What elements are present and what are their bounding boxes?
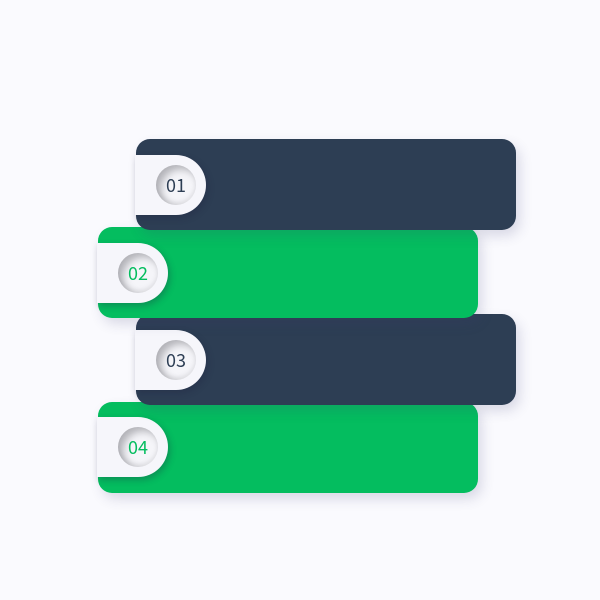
number badge: 02 (118, 253, 158, 293)
tab: step 04 (97, 417, 168, 477)
tab: step 01 (135, 155, 206, 215)
number badge: 03: 03 (166, 347, 186, 373)
number badge: 04 (118, 427, 158, 467)
number badge: 01 (156, 165, 196, 205)
panel: step 04 (98, 402, 478, 493)
panel: step 03 (136, 314, 516, 405)
panel: step 02 (98, 227, 478, 318)
number badge: 02: 02 (128, 260, 148, 286)
number badge: 04: 04 (128, 434, 148, 460)
tab: step 02 (97, 243, 168, 303)
panel: step 01 (136, 139, 516, 230)
number badge: 01: 01 (166, 172, 186, 198)
tab: step 03 (135, 330, 206, 390)
number badge: 03 (156, 340, 196, 380)
